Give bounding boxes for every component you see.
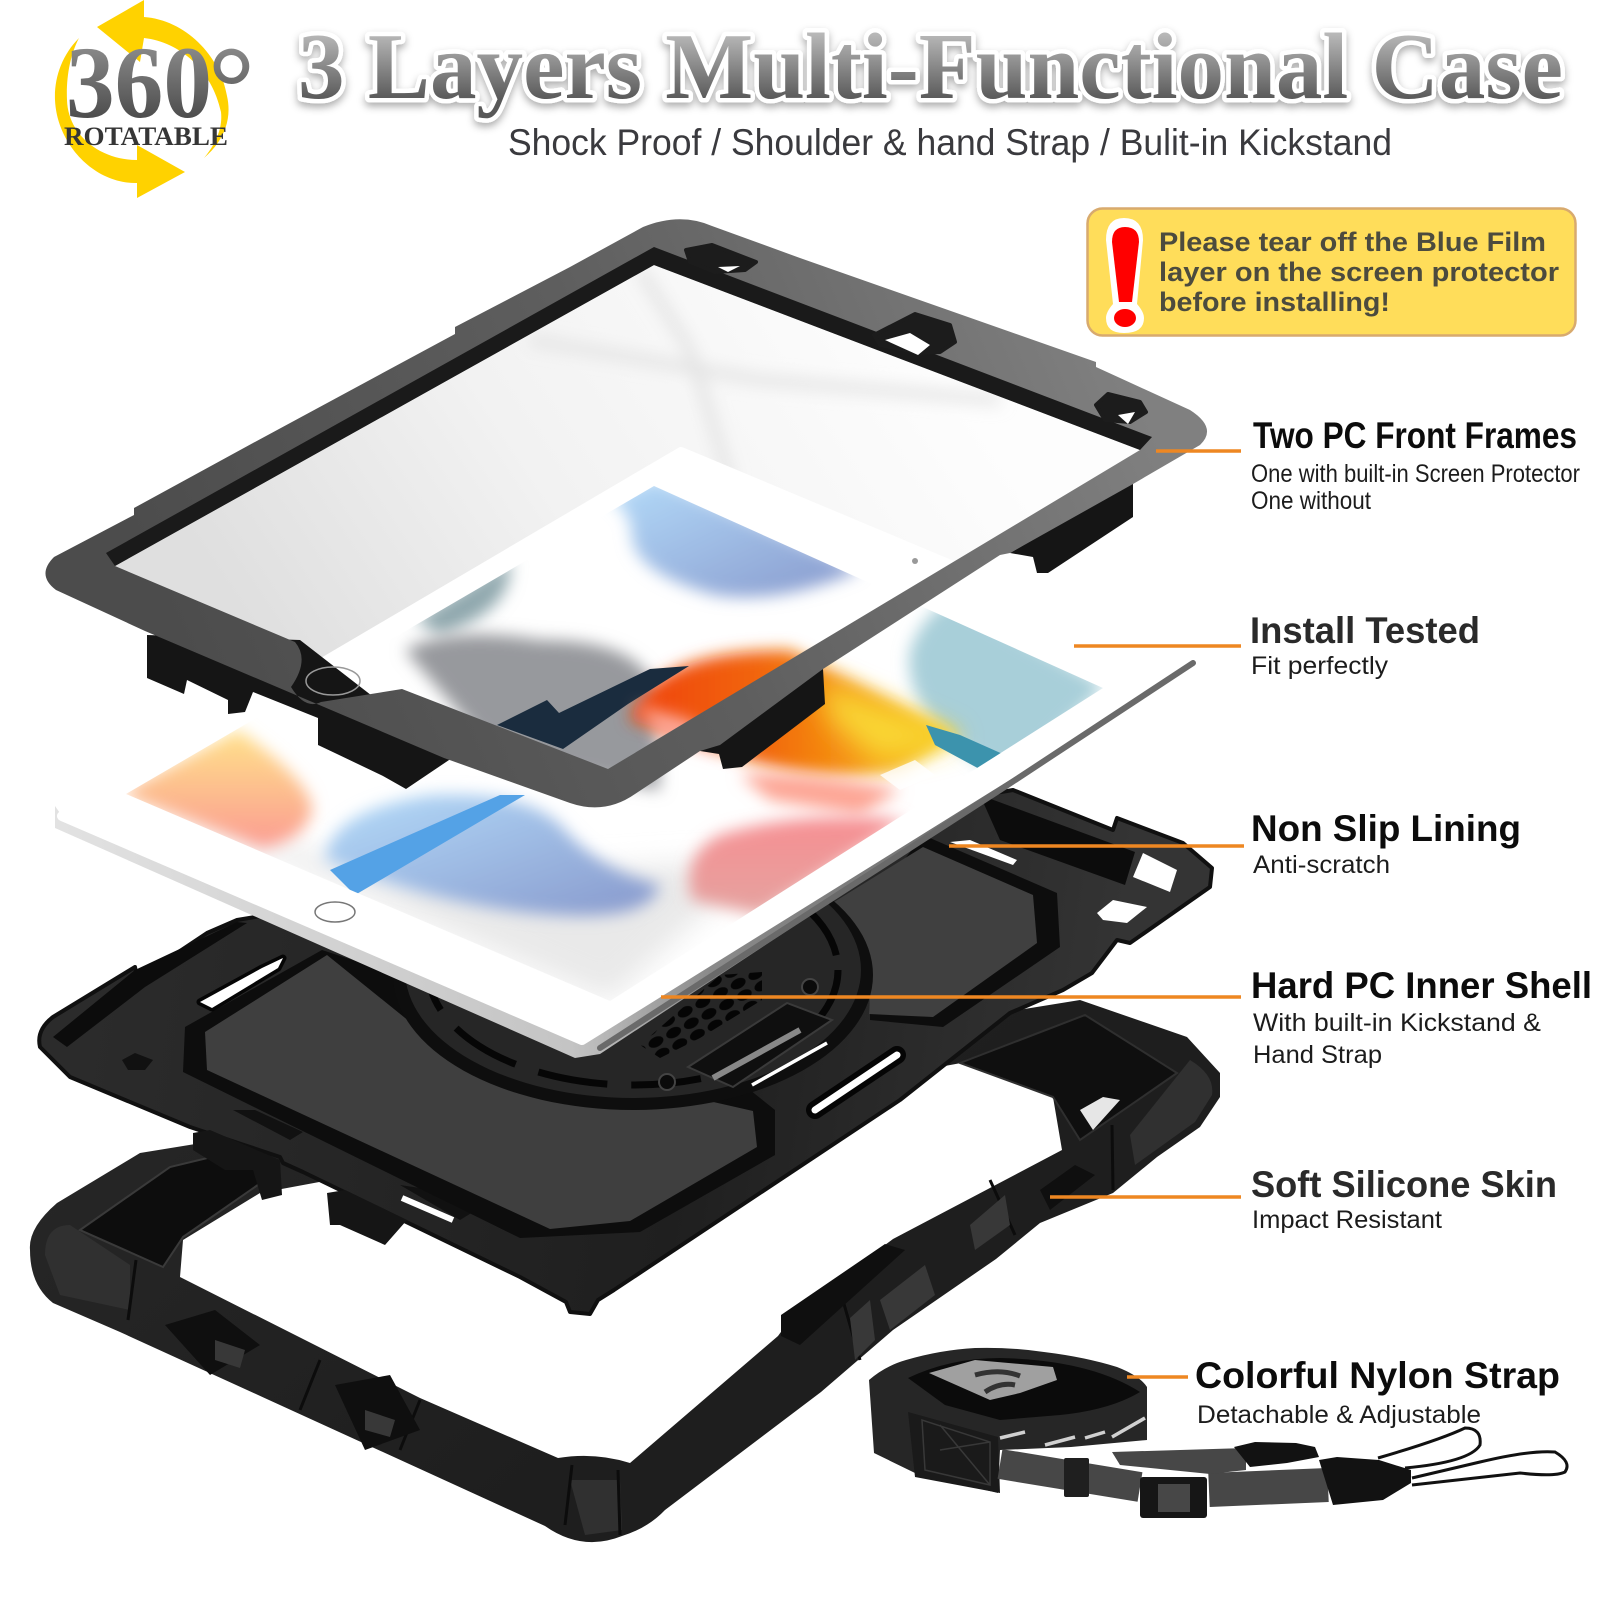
silicone outer skin (30, 1000, 1220, 1542)
skin corner highlights (45, 1060, 1212, 1535)
label: non slip lining: Anti-scratch (1253, 851, 1390, 879)
label: two PC front frames: One without (1251, 487, 1371, 515)
honeycomb vent (640, 972, 762, 1058)
pad borders (183, 835, 1060, 1238)
label: install tested: Install Tested (1250, 610, 1480, 651)
strap loop (869, 1348, 1147, 1493)
label: install tested (1074, 610, 1480, 680)
glass screen protector (115, 265, 1140, 769)
upper home button (306, 667, 360, 695)
tablet right side edge (600, 663, 1193, 1048)
callout text: before installing! (1159, 287, 1390, 317)
side clips on skin (165, 1165, 1095, 1450)
icon: yellow rotation arrows (55, 0, 229, 198)
label: hard PC inner shell (661, 965, 1592, 1069)
textured pad left (205, 955, 757, 1229)
icon: exclamation mark (1106, 218, 1144, 333)
back inner shell (39, 790, 1212, 1314)
label: colorful nylon strap (1127, 1355, 1560, 1429)
label: non slip lining (949, 808, 1521, 879)
webbing and buckles (1000, 1442, 1411, 1518)
hand strap handle (688, 1003, 832, 1087)
front frame (45, 219, 1207, 807)
cavity upper left (80, 1147, 265, 1267)
subtitle: Shock Proof / Shoulder & hand Strap / Bulit-in Kickstand (508, 122, 1392, 163)
tablet white body (62, 452, 1187, 1040)
text: 360: 360 (66, 26, 212, 140)
front camera (912, 558, 918, 564)
bottom clips of shell (193, 1130, 407, 1245)
callout box (1088, 208, 1576, 336)
label: hard PC inner shell: Hard PC Inner Shell (1251, 965, 1592, 1006)
wallpaper blobs (610, 478, 860, 597)
label: install tested: Fit perfectly (1251, 652, 1389, 680)
label: colorful nylon strap: Colorful Nylon Strap (1195, 1355, 1560, 1396)
label: soft silicone skin (1050, 1164, 1557, 1234)
cord loops (1378, 1428, 1567, 1485)
illustration: exploded view of case (30, 219, 1567, 1542)
strap inner grey print (929, 1360, 1057, 1400)
label: colorful nylon strap: Detachable & Adjustable (1197, 1401, 1481, 1429)
lower home button (315, 902, 355, 922)
label: non slip lining: Non Slip Lining (1251, 808, 1521, 849)
label: hard PC inner shell: Hand Strap (1253, 1041, 1382, 1069)
label: two PC front frames (1156, 415, 1580, 515)
title outline and shadow: 3 Layers Multi-Functional Case (298, 15, 1563, 119)
nylon strap (869, 1348, 1567, 1518)
shell rim grooves (53, 795, 1135, 1047)
label: soft silicone skin: Impact Resistant (1252, 1206, 1442, 1234)
callout text: Please tear off the Blue Film (1159, 227, 1546, 257)
textured pad right (821, 847, 1037, 1017)
leather tab (908, 1412, 1000, 1493)
tablet display (120, 478, 1105, 1001)
icon: degree ring: ° (208, 23, 255, 152)
icon: 360 degree rotatable badge (55, 0, 255, 198)
label: hard PC inner shell: With built-in Kickstand & (1253, 1009, 1541, 1037)
rotating hub (393, 840, 873, 1110)
tablet metal edge (55, 660, 1195, 1058)
label: soft silicone skin: Soft Silicone Skin (1251, 1164, 1557, 1205)
frame clips (147, 481, 1133, 789)
white slots (200, 840, 1177, 1220)
frame holes (686, 245, 1146, 422)
callout text: layer on the screen protector (1159, 257, 1560, 287)
callout text (1159, 227, 1560, 317)
warning callout (1088, 208, 1576, 336)
text: rotatable: ROTATABLE (64, 122, 228, 151)
cavity upper right (960, 1015, 1177, 1140)
title: 3 Layers Multi-Functional Case (298, 15, 1563, 119)
strap inner black (908, 1358, 1140, 1420)
reflection streaks on protector (530, 270, 1000, 480)
frame inner bevel (106, 247, 1152, 566)
tablet (55, 452, 1195, 1058)
